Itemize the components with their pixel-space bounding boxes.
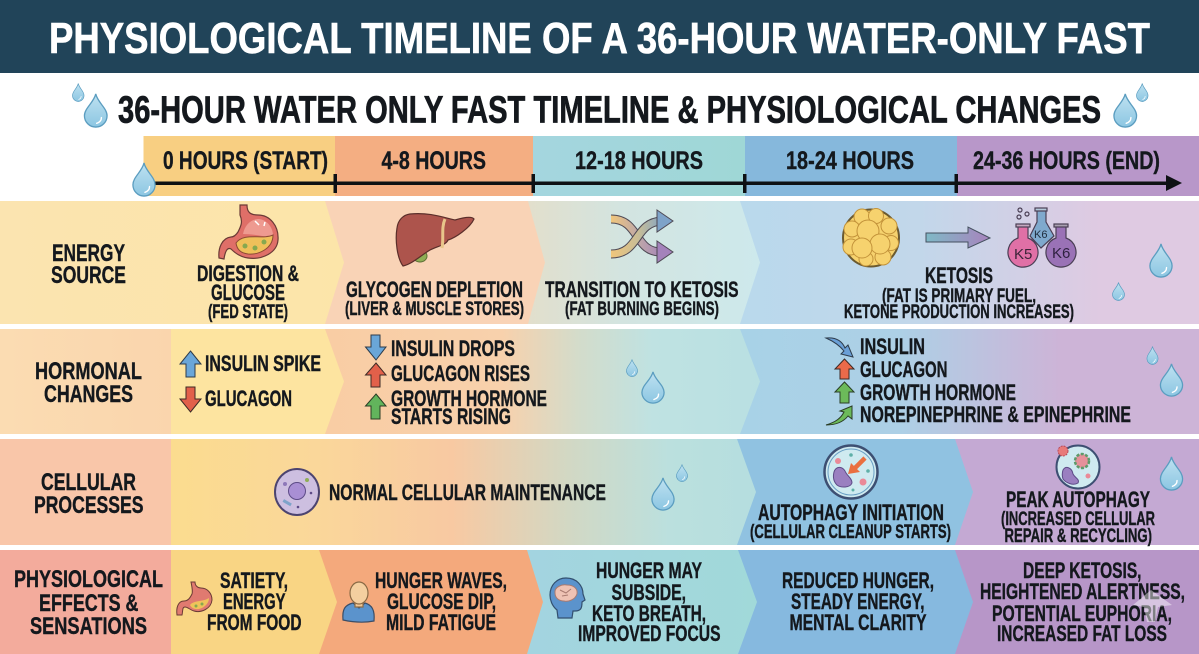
text: hunger may subside: SUBSIDE, xyxy=(612,580,686,605)
row: hormonal changes xyxy=(0,329,1199,434)
hormones at 18-36 hours xyxy=(826,334,1131,427)
row heading: PROCESSES xyxy=(34,492,144,519)
text: reduced hunger xyxy=(782,568,934,635)
text: hunger waves: HUNGER WAVES, xyxy=(375,568,507,593)
text: hunger may subside: KETO BREATH, xyxy=(592,601,706,626)
text: deep ketosis xyxy=(980,558,1185,646)
text: digestion and glucose: DIGESTION & xyxy=(197,261,299,286)
text: autophagy initiation xyxy=(750,500,951,543)
text: transition to ketosis: TRANSITION TO KETOSIS xyxy=(545,277,738,302)
row heading: EFFECTS & xyxy=(39,590,138,617)
text: reduced hunger: MENTAL CLARITY xyxy=(790,610,927,635)
timeline label: 12-18 hours: 12-18 HOURS xyxy=(575,147,703,175)
flask labels: K5 xyxy=(1014,246,1032,263)
flask labels: K6 xyxy=(1052,245,1070,262)
header banner xyxy=(0,0,1199,73)
text: satiety: FROM FOOD xyxy=(207,610,302,635)
row heading xyxy=(34,469,144,519)
icon: head with brain xyxy=(550,578,585,618)
icon: stomach xyxy=(219,205,278,259)
icon: fat cell cluster xyxy=(843,208,899,266)
text: ketosis: KETOSIS xyxy=(925,263,993,288)
hormones at 18-36 hours: GLUCAGON xyxy=(860,357,948,382)
icon: autophagy cell xyxy=(824,446,878,498)
text: digestion and glucose xyxy=(197,261,299,323)
text: hunger may subside xyxy=(578,558,720,646)
icon: timeline start drop xyxy=(133,163,155,196)
text: satiety: ENERGY xyxy=(223,589,286,614)
icon: liver xyxy=(396,214,474,266)
row heading: SOURCE xyxy=(51,262,126,289)
hormones at 0 hours xyxy=(180,351,321,412)
icon: water drops xyxy=(1147,347,1183,396)
hormones at 4-8 hours: GROWTH HORMONE xyxy=(391,386,547,411)
text: digestion and glucose: (FED STATE) xyxy=(208,301,288,323)
row heading: CELLULAR xyxy=(41,469,136,496)
icon: ketone flasks xyxy=(1008,208,1076,267)
row heading: PHYSIOLOGICAL xyxy=(14,566,163,593)
icon: water drop xyxy=(1160,457,1183,490)
icon: person xyxy=(343,582,374,622)
icon: arrow to ketones xyxy=(926,227,990,248)
row heading: SENSATIONS xyxy=(30,613,147,640)
text: satiety: SATIETY, xyxy=(220,568,288,593)
hormones at 0 hours: INSULIN SPIKE xyxy=(205,351,321,376)
text: transition to ketosis: (FAT BURNING BEGINS) xyxy=(565,298,719,320)
text: satiety xyxy=(207,568,302,635)
icon: crossing arrows xyxy=(611,210,673,263)
timeline header bar xyxy=(133,136,1199,196)
text: hunger waves xyxy=(375,568,507,635)
text: deep ketosis: DEEP KETOSIS, xyxy=(1023,558,1142,583)
icon: water drops xyxy=(1112,244,1172,300)
text: hunger waves: MILD FATIGUE xyxy=(386,610,496,635)
icon: water drops xyxy=(626,359,664,403)
hormones at 4-8 hours: GLUCAGON RISES xyxy=(391,361,530,386)
row heading: ENERGY xyxy=(52,240,125,267)
row: cellular processes xyxy=(0,439,1199,547)
row heading: HORMONAL xyxy=(35,358,142,385)
text: glycogen depletion: GLYCOGEN DEPLETION xyxy=(346,277,523,302)
flask labels: K6 xyxy=(1034,229,1047,241)
text: reduced hunger: REDUCED HUNGER, xyxy=(782,568,934,593)
timeline label: 4-8 hours: 4-8 HOURS xyxy=(382,147,486,175)
row heading: CHANGES xyxy=(44,381,133,408)
text: ketosis: (FAT IS PRIMARY FUEL, xyxy=(882,285,1036,307)
icon: small stomach xyxy=(177,582,212,615)
row heading xyxy=(14,566,163,640)
text: glycogen depletion: (LIVER & MUSCLE STORES) xyxy=(345,298,524,320)
text: normal cellular maintenance: NORMAL CELLULAR MAINTENANCE xyxy=(329,480,606,505)
hormones at 4-8 hours xyxy=(366,335,547,429)
hormones at 18-36 hours: INSULIN xyxy=(860,334,925,359)
text: glycogen depletion xyxy=(345,277,524,320)
hormones at 18-36 hours: GROWTH HORMONE xyxy=(860,380,1016,405)
text: peak autophagy xyxy=(1001,487,1155,547)
timeline label: 18-24 hours: 18-24 HOURS xyxy=(786,147,914,175)
row: physiological effects and sensations xyxy=(0,550,1199,654)
row: energy source xyxy=(0,201,1199,324)
hormones at 4-8 hours: INSULIN DROPS xyxy=(391,336,515,361)
icon: peak autophagy cell xyxy=(1056,446,1100,488)
timeline label: 0 hours: 0 HOURS (START) xyxy=(163,147,328,175)
text: ketosis xyxy=(844,263,1074,323)
text: hunger waves: GLUCOSE DIP, xyxy=(387,589,496,614)
text: ketosis: KETONE PRODUCTION INCREASES) xyxy=(844,301,1074,323)
text: transition to ketosis xyxy=(545,277,738,320)
text: digestion and glucose: GLUCOSE xyxy=(211,280,285,305)
watermark star xyxy=(1133,590,1172,622)
subtitle with water drops xyxy=(72,84,1148,132)
row heading xyxy=(35,358,142,408)
icon: water drops xyxy=(652,464,688,510)
flask labels xyxy=(1014,229,1070,263)
text: autophagy initiation: (CELLULAR CLEANUP STARTS) xyxy=(750,521,951,543)
text: hunger may subside: IMPROVED FOCUS xyxy=(578,621,720,646)
icon: normal cell xyxy=(275,469,319,515)
timeline arrow axis xyxy=(150,174,1182,193)
text: autophagy initiation: AUTOPHAGY INITIATION xyxy=(758,500,944,525)
hormones at 0 hours: GLUCAGON xyxy=(205,386,292,411)
hormones at 4-8 hours: STARTS RISING xyxy=(391,404,511,429)
text: reduced hunger: STEADY ENERGY, xyxy=(791,589,924,614)
row heading xyxy=(51,240,126,289)
text: hunger may subside: HUNGER MAY xyxy=(596,558,702,583)
